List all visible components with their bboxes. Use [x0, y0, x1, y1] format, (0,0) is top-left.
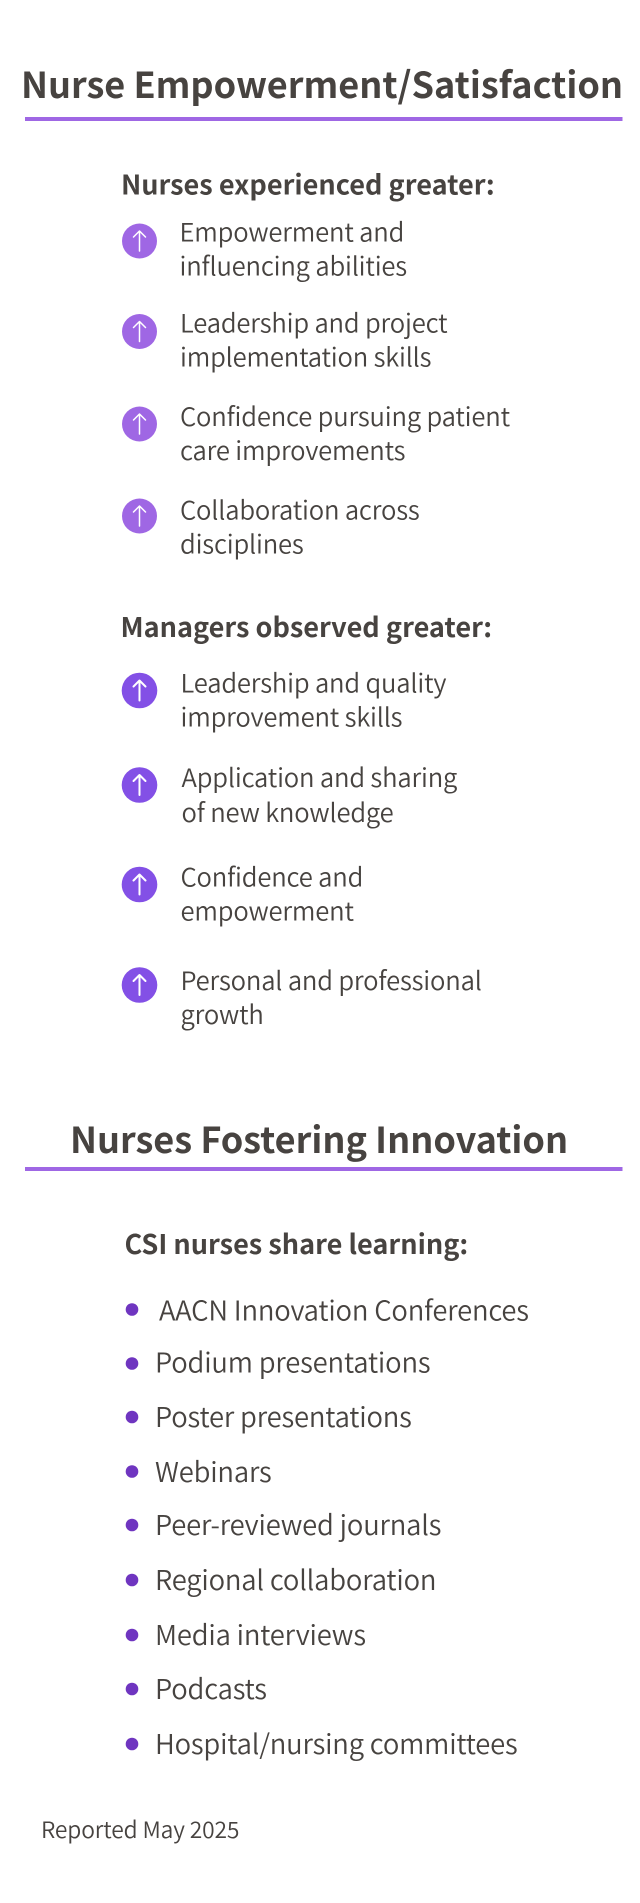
list item: growth [122, 961, 482, 1032]
list item: new knowledge: of new knowledge [182, 793, 394, 830]
list item: confidence: Confidence pursuing patient [180, 397, 511, 434]
list item: collaboration: Collaboration across [180, 490, 420, 528]
footer note: Reported May 2025 [41, 1812, 239, 1845]
bullet: AACN: AACN Innovation Conferences [159, 1288, 529, 1328]
list item: confidence and empowerment: Confidence and [180, 858, 363, 894]
list item: empowerment: influencing abilities [180, 246, 407, 284]
list item: quality improvement [122, 664, 446, 734]
list item: confidence [122, 397, 511, 468]
list item: confidence: care improvements [180, 431, 405, 468]
list item: confidence and empowerment [122, 858, 363, 928]
bullet: media: Media interviews [155, 1613, 366, 1653]
list item: leadership: Leadership and project [180, 304, 448, 340]
bullet: journals: Peer-reviewed journals [155, 1503, 441, 1543]
title: Nurse Empowerment/Satisfaction: Nurse Empowerment/Satisfaction [21, 57, 623, 109]
heading rule [25, 117, 622, 121]
list item: new knowledge: Application and sharing [182, 758, 457, 795]
subheading: nurses experienced greater: Nurses experienced greater: [121, 164, 495, 202]
list item: quality improvement: Leadership and quality [180, 664, 446, 700]
subheading: CSI nurses share learning: CSI nurses share learning: [124, 1223, 468, 1262]
title: Nurses Fostering Innovation: Nurses Fostering Innovation [70, 1112, 568, 1164]
bullet: regional: Regional collaboration [155, 1558, 436, 1598]
list item: leadership [122, 304, 448, 374]
list item: confidence and empowerment: empowerment [180, 892, 354, 928]
subheading: managers observed greater: Managers observed greater: [120, 606, 492, 645]
bullet: poster: Poster presentations [155, 1395, 412, 1435]
bullet: committees: Hospital/nursing committees [155, 1722, 518, 1762]
list item: new knowledge [122, 758, 457, 830]
list item: empowerment: Empowerment and [180, 212, 404, 250]
list item: leadership: implementation skills [180, 338, 431, 374]
list item: growth: growth [180, 995, 264, 1032]
heading rule [25, 1167, 622, 1171]
bullet: podcasts: Podcasts [155, 1667, 267, 1707]
list item: empowerment [122, 212, 407, 284]
list item: collaboration [122, 490, 420, 562]
list item: quality improvement: improvement skills [180, 698, 402, 734]
bullet: webinars: Webinars [155, 1450, 272, 1490]
list item: collaboration: disciplines [180, 524, 304, 562]
bullet: podium: Podium presentations [155, 1340, 430, 1380]
list item: growth: Personal and professional [180, 961, 482, 998]
